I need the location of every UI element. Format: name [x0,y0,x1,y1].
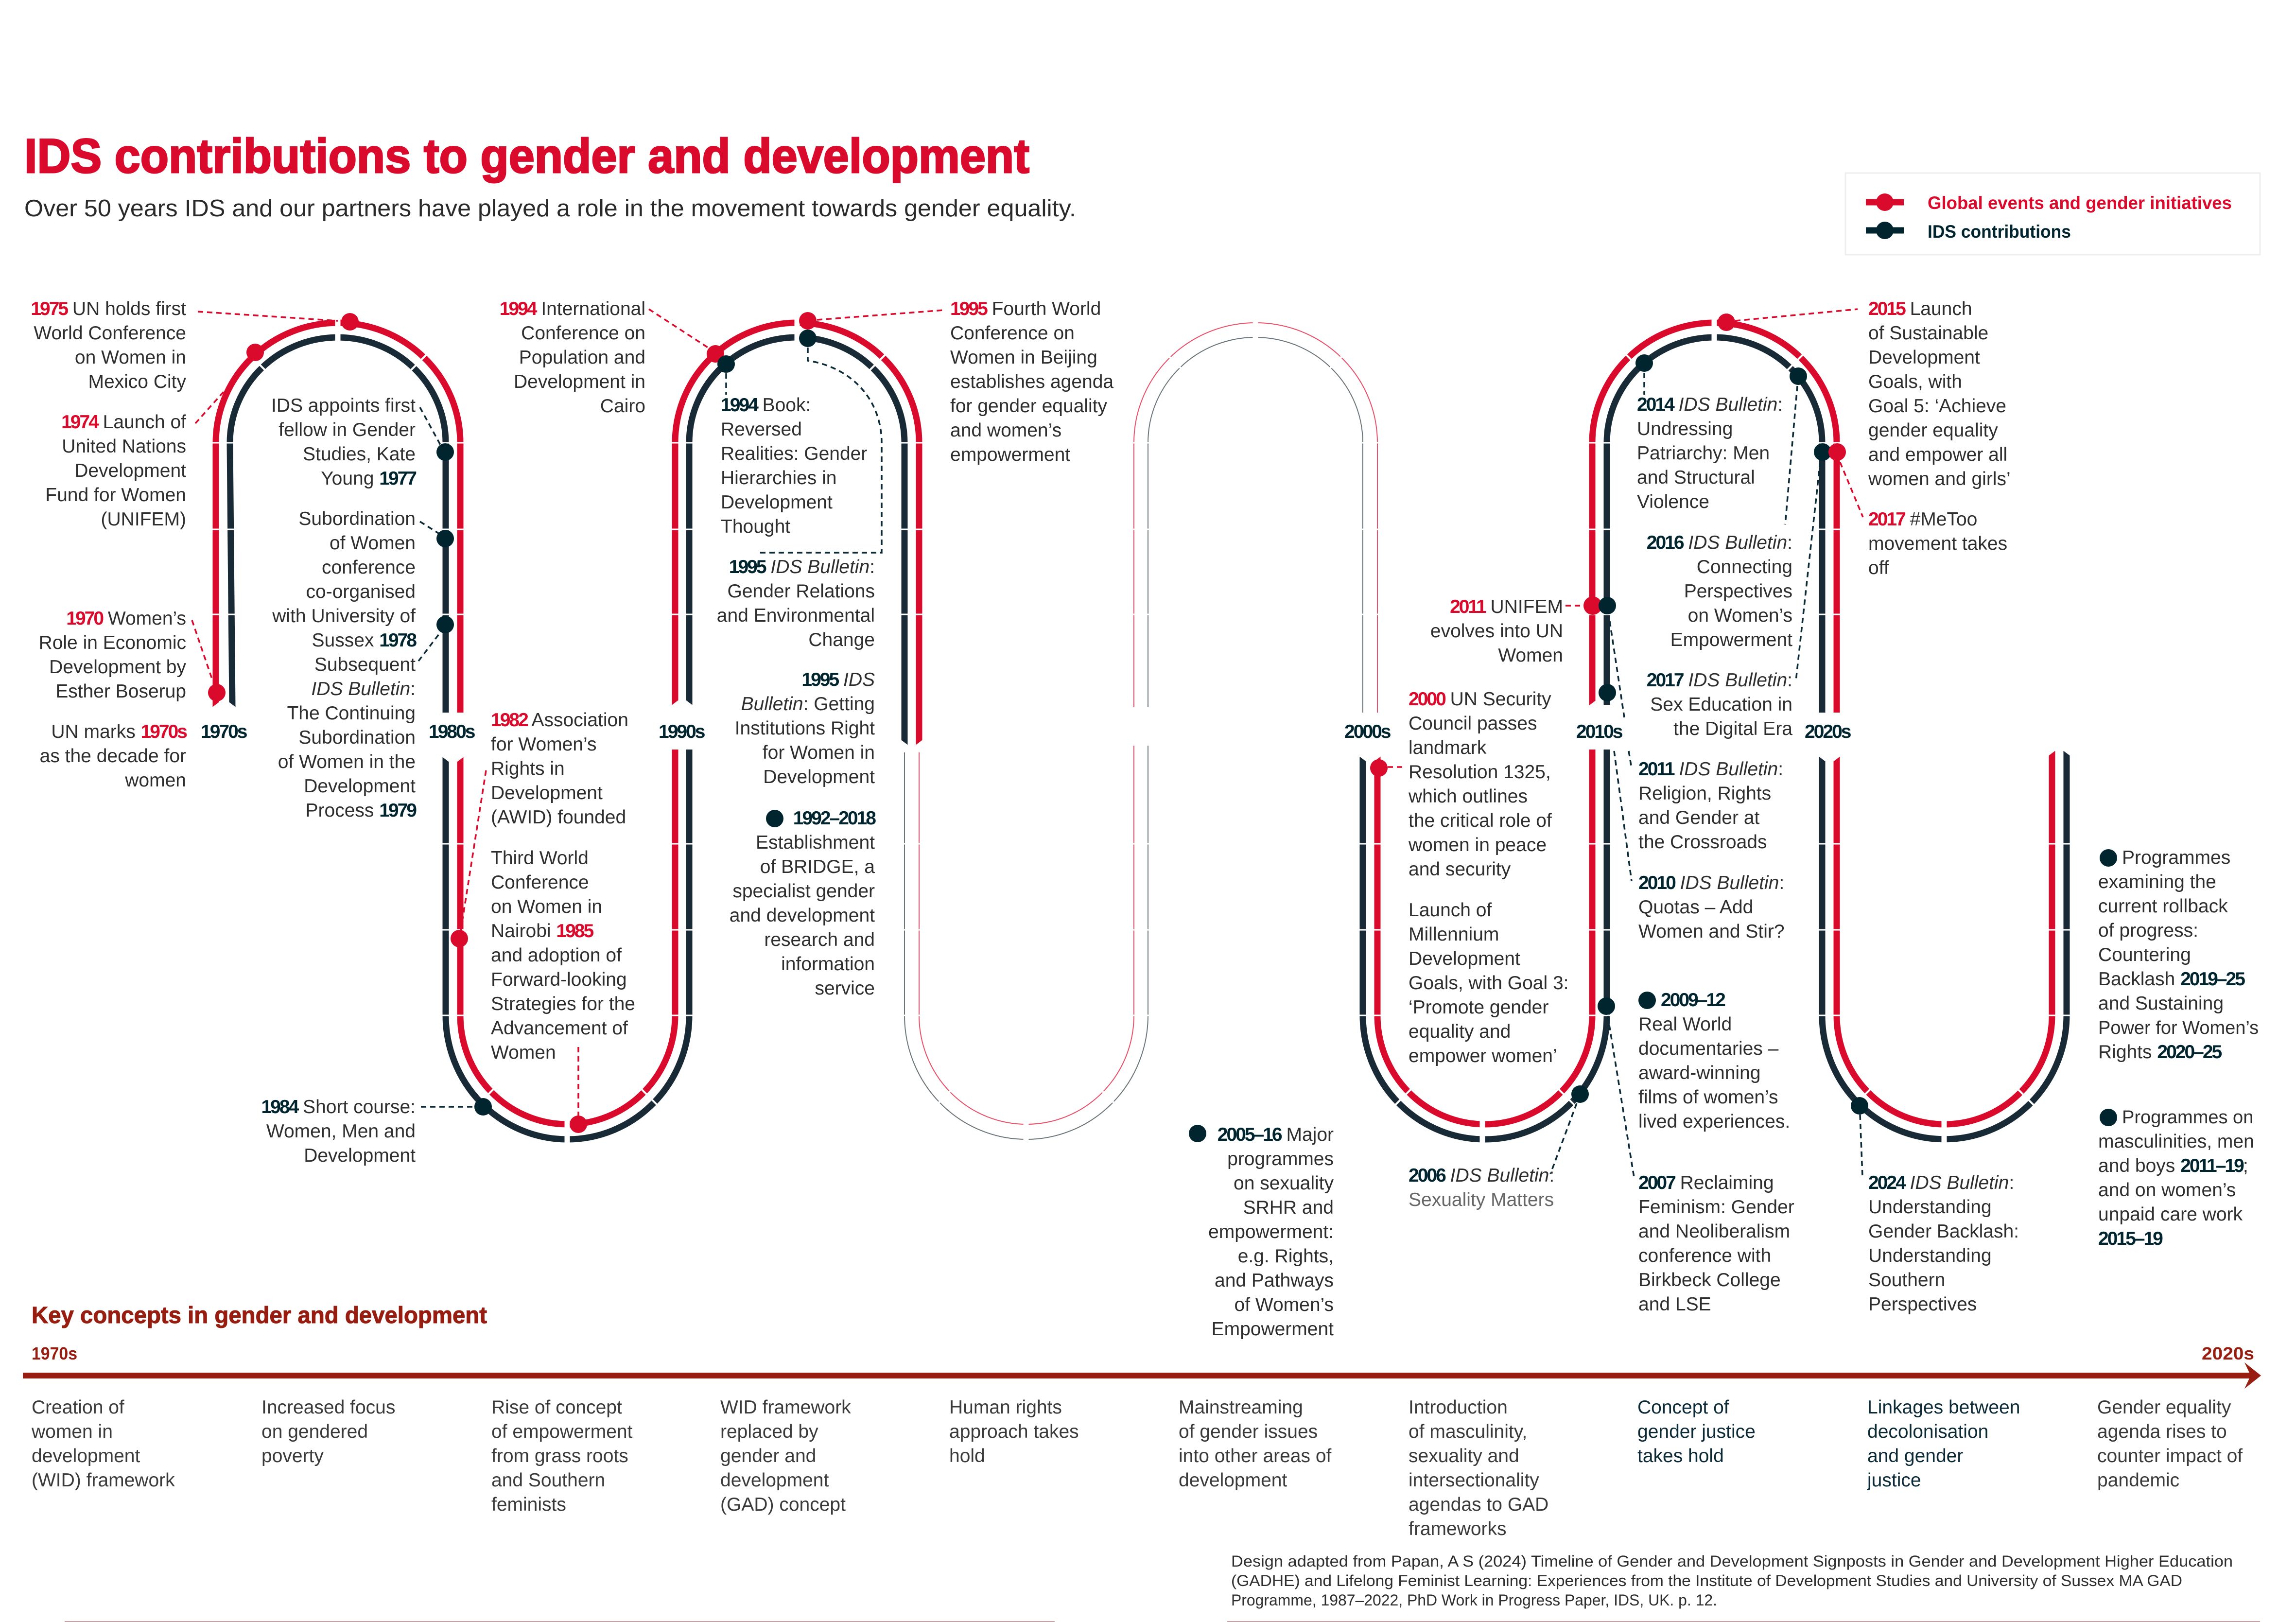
text: 2000 UN Security Council: women in peace [1408,835,1547,855]
concept: empowerment: of empowerment [491,1421,633,1442]
text: 1992-2018 BRIDGE: and development [730,905,875,926]
legend: Global events and gender initiatives [1928,193,2232,213]
key concepts start label: 1970s [32,1343,77,1363]
text: Millennium Development Goals: Development [1409,948,1520,969]
text: 2024 IDS Bulletin: Understanding [1868,1197,1992,1218]
concept: pandemic: agenda rises to [2097,1421,2227,1442]
text: 1994 Cairo conference: Conference on [521,323,645,344]
decade label: 2010s: 2010s [1576,721,1623,742]
text: 1995 bulletin gender relations: 1995 IDS Bulletin: [729,557,875,577]
text: 1974 UNIFEM: United Nations [62,436,186,457]
arrow: key concepts timeline [23,1362,2261,1389]
text: 1975 UN conference: 1975 UN holds first [31,298,186,319]
text: 1995 Beijing conference: 1995 Fourth World [950,298,1101,319]
text: 2006 IDS Bulletin: 2006 IDS Bulletin: [1409,1165,1554,1186]
text: 2016 IDS Bulletin: Empowerment [1670,629,1792,650]
text: 2016 IDS Bulletin: Perspectives [1684,581,1792,602]
text: 1984 short course: Women, Men and [266,1121,416,1142]
concept: decolonisation: justice [1867,1470,1921,1491]
text: 1982 AWID: 1982 Association [491,710,628,731]
text: 1978 conference and 1979 bulletin: co-organised [306,581,416,602]
concept: GAD: WID framework [720,1397,851,1418]
concept: pandemic: Gender equality [2097,1397,2231,1418]
subtitle: Over 50 years IDS and our partners have played a role in the movement towards gender equality. [24,195,1076,222]
marker: 1970 Boserup [192,620,226,701]
text: rollback programmes: Programmes [2122,847,2230,868]
text: 2011 IDS Bulletin: 2011 IDS Bulletin: [1638,759,1783,780]
text: masculinities programmes: Programmes on [2122,1107,2253,1128]
text: masculinities programmes: 2015–19 [2098,1228,2163,1249]
text: 2017 MeToo: off [1868,558,1889,578]
marker: 2017 MeToo [1828,443,1863,517]
marker: 1974 UNIFEM [195,344,264,423]
text: 2005-16 programmes [1189,1124,1334,1340]
marker: 2007 and 2009-12 [1598,997,1634,1177]
text: 2009-12 Real World: Real World [1638,1014,1732,1035]
text: 1978 conference and 1979 bulletin: with University of [272,606,416,627]
text: 1970 Boserup: Role in Economic [39,632,186,653]
marker: 1995 Beijing conference [799,310,944,330]
text: 2005-16 programmes: SRHR and [1243,1197,1334,1218]
text: 1995 Beijing conference: empowerment [950,444,1070,465]
marker: 2024 IDS Bulletin [1851,1097,1868,1176]
concept: empowerment: Rise of concept [491,1397,622,1418]
text: rollback programmes: examining the [2098,872,2216,892]
text: 2005-16 programmes: 2005–16 Major [1218,1124,1334,1145]
decade label: 1980s: 1980s [429,721,475,742]
concept: gendered poverty: on gendered [261,1421,368,1442]
concept: mainstreaming: Mainstreaming [1179,1397,1303,1418]
text: 1978 conference and 1979 bulletin: of Women [330,533,416,554]
text: 1978 conference and 1979 bulletin: conference [322,557,416,578]
text: 2007 Reclaiming Feminism: Birkbeck College [1638,1270,1781,1291]
text: 2011 UN Women: 2011 UNIFEM [1450,596,1563,617]
text: Millennium Development Goals: equality and [1409,1021,1511,1042]
marker: 2000 resolution [1370,759,1406,777]
text: 1994 book: Development [721,492,833,513]
concept: mainstreaming: into other areas of [1179,1446,1332,1466]
text: 2009-12 Real World: films of women’s [1638,1087,1778,1108]
text: 2016 IDS Bulletin: 2016 IDS Bulletin: [1647,532,1792,553]
text: 1994 book: Realities: Gender [721,443,867,464]
concept: human rights: hold [949,1446,985,1466]
text: 2010 IDS Bulletin: 2010 IDS Bulletin: [1638,872,1784,893]
text: Millennium Development Goals: Millennium [1409,924,1499,945]
text: 1985 Nairobi conference: Conference [491,872,589,893]
text: 1978 conference and 1979 bulletin: of Women in the [278,751,416,772]
text: 2005-16 programmes: of Women’s [1235,1294,1334,1315]
text: masculinities programmes: and on women’s [2098,1180,2236,1201]
text: 1978 conference and 1979 bulletin: Subsequent [314,654,416,675]
text: 2014 IDS Bulletin: and Structural [1637,467,1755,488]
decade label: 2020s: 2020s [1805,721,1851,742]
concept: GAD: gender and [720,1446,816,1466]
text: 2007 Reclaiming Feminism: and LSE [1638,1294,1711,1315]
text: 1994 Cairo conference: 1994 International [500,298,645,319]
text: 1970 Boserup: 1970 Women’s [66,608,186,629]
marker: 1994 Cairo conference [649,309,724,363]
marker: 2010 IDS Bulletin [1599,684,1632,881]
text: UN decade for women: UN marks 1970s [51,721,186,742]
text: 1995 Beijing conference: Women in Beijing [950,347,1097,368]
text: 2014 IDS Bulletin: Undressing [1637,419,1733,439]
text: 1982 AWID: Development [491,783,603,803]
marker: 1984 short course [421,1098,492,1116]
text: 2014 IDS Bulletin: Patriarchy: Men [1637,443,1770,464]
text: 1974 UNIFEM: Fund for Women [45,485,186,506]
text: 2006 IDS Bulletin: Sexuality Matters [1409,1189,1554,1210]
text: 1995 Beijing conference: and women’s [950,420,1061,441]
decade label: 2000s: 2000s [1344,721,1391,742]
concept: pandemic: counter impact of [2097,1446,2243,1466]
text: 2015 SDGs: and empower all [1868,444,2007,465]
concept: gendered poverty: poverty [261,1446,324,1466]
text: 1995 bulletin gender relations: Change [808,629,875,650]
marker: 1979 IDS Bulletin [418,616,454,661]
concept: gender justice: Concept of [1637,1397,1729,1418]
text: 2005-16 programmes: programmes [1227,1149,1334,1169]
text: 1995 bulletin institutions: Institutions Right [735,718,875,739]
text: 1985 Nairobi conference: Third World [491,848,589,869]
marker: 2011 UN Women [1565,596,1602,615]
concept: empowerment: from grass roots [491,1446,628,1466]
concept: decolonisation: Linkages between [1867,1397,2020,1418]
text: 2016 IDS Bulletin: on Women’s [1688,605,1792,626]
concept: pandemic: pandemic [2097,1470,2179,1491]
text: 1992-2018 BRIDGE: service [815,978,875,999]
text: 1992-2018 BRIDGE: research and [764,929,875,950]
text: 2015 SDGs: Goal 5: ‘Achieve [1868,396,2006,417]
source note: Design adapted from Papan, A S (2024) Timeline of Gender and Development Signposts in Gender and Development Higher Education [1231,1552,2233,1570]
text: 1985 Nairobi conference: Women [491,1042,556,1063]
concept: WID: development [32,1446,140,1466]
text: masculinities programmes: and boys 2011–19; [2098,1155,2248,1176]
text: 1992-2018 BRIDGE: Establishment [756,832,875,853]
text: 1995 Beijing conference: for gender equality [950,396,1108,417]
text: 2016 IDS Bulletin: Connecting [1697,557,1792,577]
text: masculinities programmes [2098,1107,2254,1249]
marker: 2014 IDS Bulletin [1635,354,1653,395]
text: 1992-2018 BRIDGE [730,808,876,999]
legend: IDS contributions [1928,222,2071,242]
text: 2011 IDS Bulletin: Religion, Rights [1638,783,1771,804]
text: 1994 Cairo conference: Cairo [600,396,645,417]
concept: masculinity and intersectionality: agendas to GAD [1409,1494,1548,1515]
text: 1974 UNIFEM: Development [74,460,186,481]
text: 1992-2018 BRIDGE: specialist gender [732,881,875,902]
marker: 2017 IDS Bulletin [1796,443,1831,681]
text: 1994 book: 1994 Book: [721,395,811,416]
text: 1995 bulletin institutions: Development [763,767,875,787]
text: rollback programmes: of progress: [2098,920,2198,941]
concept: GAD: (GAD) concept [720,1494,846,1515]
text: 2011 UN Women: evolves into UN [1430,621,1563,642]
concept: gender justice: gender justice [1637,1421,1756,1442]
text: 2014 IDS Bulletin: 2014 IDS Bulletin: [1637,394,1783,415]
text: 2000 UN Security Council: which outlines [1408,786,1528,807]
text: 2011 IDS Bulletin: the Crossroads [1638,832,1767,853]
text: 1978 conference and 1979 bulletin: Sussex 1978 [312,630,416,651]
text: 2005-16 programmes: Empowerment [1212,1319,1334,1340]
marker: 2006 IDS Bulletin [1550,1085,1589,1174]
text: 2005-16 programmes: empowerment: [1208,1221,1334,1242]
text: 1994 Cairo conference: Population and [519,347,645,368]
text: 1984 short course: 1984 Short course: [261,1097,416,1117]
text: UN decade for women: women [124,770,186,791]
text: 1995 bulletin institutions: 1995 IDS [801,669,875,690]
text: 1982 AWID: Rights in [491,758,565,779]
text: 2000 UN Security Council: landmark [1409,737,1487,758]
text: 1978 conference and 1979 bulletin: IDS Bulletin: [311,679,416,699]
text: 2009-12 Real World [1638,990,1790,1132]
text: 1974 UNIFEM: (UNIFEM) [101,509,186,530]
text: 2009-12 Real World: award-winning [1638,1063,1760,1083]
text: 2024 IDS Bulletin: Gender Backlash: [1868,1221,2019,1242]
text: Millennium Development Goals: Launch of [1409,900,1492,921]
concept: masculinity and intersectionality: frameworks [1409,1518,1507,1539]
text: 2015 SDGs: Goals, with [1868,371,1962,392]
text: 1978 conference and 1979 bulletin: The Continuing [287,703,416,724]
text: 2009-12 Real World: lived experiences. [1638,1111,1790,1132]
source note [1231,1552,2233,1609]
timeline track: 1970s arch [216,323,460,713]
text: 1970 Boserup: Esther Boserup [55,681,186,702]
text: 2017 MeToo: 2017 #MeToo [1868,509,1977,530]
text: 2024 IDS Bulletin: Southern [1868,1270,1945,1291]
marker: 1975 UN conference [198,312,359,331]
text: 2024 IDS Bulletin: 2024 IDS Bulletin: [1868,1172,2014,1193]
text: 1994 book: Thought [721,516,790,537]
timeline track: 2000s curve [1363,750,1607,1139]
concept: decolonisation: and gender [1867,1446,1963,1466]
text: 1985 Nairobi conference: on Women in [491,896,602,917]
concept: WID: (WID) framework [32,1470,175,1491]
marker: 2011 IDS Bulletin [1599,597,1632,768]
text: 2011 IDS Bulletin: and Gender at [1638,807,1760,828]
timeline track: 2020s curve [1822,750,2067,1139]
text: 2000 UN Security Council: and security [1409,859,1511,880]
timeline track: 1990s arch [675,323,919,745]
marker: 1995 IDS Bulletin [758,330,882,553]
text: 1994 book: Hierarchies in [721,468,836,488]
text: 2015 SDGs: of Sustainable [1868,323,1988,344]
text: 2010 IDS Bulletin: Women and Stir? [1638,921,1785,942]
title: IDS contributions to gender and development [24,129,1029,183]
text: 1995 Beijing conference: Conference on [950,323,1075,344]
concept: masculinity and intersectionality: intersectionality [1409,1470,1539,1491]
text: 1985 Nairobi conference: and adoption of [491,945,622,966]
marker: 1994 book [717,355,735,395]
concept: WID: women in [31,1421,113,1442]
marker: 1985 strategies [570,1047,587,1133]
text: 1977 IDS fellow: fellow in Gender [278,419,416,440]
text: 1985 Nairobi conference: Nairobi 1985 [491,921,592,942]
text: 1982 AWID: for Women’s [491,734,596,755]
text: 2015 SDGs: gender equality [1868,420,1998,441]
text: 1985 Nairobi conference: Forward-looking [491,969,627,990]
text: 2007 Reclaiming Feminism: 2007 Reclaiming [1638,1172,1774,1193]
text: 1992-2018 BRIDGE: of BRIDGE, a [760,856,875,877]
text: rollback programmes: current rollback [2098,896,2228,917]
text: masculinities programmes: unpaid care work [2098,1204,2243,1225]
text: 2017 IDS Bulletin: Sex Education in [1650,694,1792,715]
concept: masculinity and intersectionality: Introduction [1409,1397,1508,1418]
source note: (GADHE) and Lifelong Feminist Learning: Experiences from the Institute of Development Studies and University of Sussex MA GAD [1231,1572,2182,1589]
timeline track: faint upper arch [1134,323,1377,713]
text: 2015 SDGs: Development [1868,347,1980,368]
text: 2010 IDS Bulletin: Quotas – Add [1638,897,1753,918]
legend [1845,173,2260,255]
text: 1978 conference and 1979 bulletin: Subordination [298,508,416,529]
marker: 1977 IDS fellow [420,407,454,461]
text: 1978 conference and 1979 bulletin: Process 1979 [306,800,416,821]
text: 1995 bulletin institutions: for Women in [763,742,875,763]
text: 2024 IDS Bulletin: Perspectives [1868,1294,1977,1315]
concept: mainstreaming: development [1179,1470,1287,1491]
concept: WID: Creation of [32,1397,124,1418]
text: 1977 IDS fellow: Young 1977 [321,468,416,489]
text: 2017 IDS Bulletin: the Digital Era [1673,718,1792,739]
text: 1994 Cairo conference: Development in [514,371,645,392]
text: 1982 AWID: (AWID) founded [491,807,626,828]
concept: empowerment: feminists [491,1494,566,1515]
text: rollback programmes [2098,847,2259,1063]
text: 1992-2018 BRIDGE: 1992–2018 [793,808,876,829]
text: 2000 UN Security Council: 2000 UN Security [1409,689,1551,710]
text: 2005-16 programmes: on sexuality [1234,1173,1334,1194]
timeline track: 1980s curve [446,750,689,1139]
concept: GAD: development [720,1470,829,1491]
marker: 1982 and 1985 [451,770,486,947]
concept: mainstreaming: of gender issues [1179,1421,1318,1442]
concept: gendered poverty: Increased focus [261,1397,395,1418]
decade label: 1990s: 1990s [659,721,705,742]
text: 2005-16 programmes: e.g. Rights, [1238,1246,1334,1267]
concept: GAD: replaced by [720,1421,818,1442]
text: 2007 Reclaiming Feminism: Feminism: Gender [1638,1197,1794,1218]
text: 1970 Boserup: Development by [49,657,186,678]
text: rollback programmes: Rights 2020–25 [2098,1042,2221,1063]
text: 1995 Beijing conference: establishes agenda [950,371,1113,392]
text: 1974 UNIFEM: 1974 Launch of [61,412,186,433]
text: 1985 Nairobi conference: Strategies for the [491,994,635,1014]
concept: human rights: approach takes [949,1421,1079,1442]
text: 2000 UN Security Council: Council passes [1409,713,1537,734]
text: Millennium Development Goals: empower women’ [1409,1046,1557,1066]
text: 1985 Nairobi conference: Advancement of [491,1018,628,1039]
heading: key concepts: Key concepts in gender and development [32,1303,487,1328]
source note: Programme, 1987–2022, PhD Work in Progress Paper, IDS, UK. p. 12. [1231,1591,1717,1609]
marker: 2015 SDGs [1718,309,1858,331]
text: 1992-2018 BRIDGE: information [781,954,875,975]
text: 2005-16 programmes: and Pathways [1215,1270,1334,1291]
text: 2017 IDS Bulletin: 2017 IDS Bulletin: [1647,670,1792,691]
text: 1994 book: Reversed [721,419,802,440]
text: 2009-12 Real World: 2009–12 [1661,990,1725,1011]
text: 1975 UN conference: World Conference [34,323,186,344]
text: rollback programmes: Power for Women’s [2098,1018,2259,1038]
text: rollback programmes: Backlash 2019–25 [2098,969,2244,990]
text: 2007 Reclaiming Feminism: and Neoliberalism [1638,1221,1790,1242]
concept: decolonisation: decolonisation [1867,1421,1988,1442]
text: Millennium Development Goals: ‘Promote gender [1409,997,1548,1018]
text: 2017 MeToo: movement takes [1868,533,2007,554]
text: 2009-12 Real World: documentaries – [1638,1038,1779,1059]
marker: 2016 IDS Bulletin [1785,367,1807,524]
text: 1995 bulletin gender relations: and Environmental [717,605,875,626]
text: 2007 Reclaiming Feminism: conference with [1638,1245,1771,1266]
text: rollback programmes: and Sustaining [2098,993,2224,1014]
text: 2011 UN Women: Women [1498,645,1563,666]
text: 1975 UN conference: on Women in [75,347,186,368]
text: 2000 UN Security Council: Resolution 1325, [1409,762,1551,783]
concept: masculinity and intersectionality: of masculinity, [1409,1421,1527,1442]
timeline track: faint lower curve [904,746,1148,1139]
text: 2015 SDGs: 2015 Launch [1868,298,1972,319]
text: rollback programmes: Countering [2098,944,2191,965]
concept: masculinity and intersectionality: sexuality and [1409,1446,1519,1466]
marker: 1978 Subordination conference [420,522,454,547]
text: Millennium Development Goals: Goals, with Goal 3: [1409,973,1568,994]
text: 1995 bulletin institutions: Bulletin: Getting [741,694,875,715]
concept: gender justice: takes hold [1637,1446,1724,1466]
timeline track: 2010s arch [1592,323,1837,713]
text: 1995 bulletin gender relations: Gender Relations [727,581,875,602]
text: 2024 IDS Bulletin: Understanding [1868,1245,1992,1266]
text: 2015 SDGs: women and girls’ [1868,469,2011,489]
text: 2014 IDS Bulletin: Violence [1637,491,1709,512]
concept: human rights: Human rights [949,1397,1062,1418]
text: 1984 short course: Development [304,1145,416,1166]
concept: empowerment: and Southern [491,1470,605,1491]
decade label: 1970s: 1970s [201,721,247,742]
key concepts end label: 2020s [2202,1343,2254,1363]
text: 1978 conference and 1979 bulletin: Subordination [298,727,416,748]
text: 1977 IDS fellow: Studies, Kate [303,444,416,465]
text: 1975 UN conference: Mexico City [88,371,186,392]
text: UN decade for women: as the decade for [40,746,186,767]
text: 1978 conference and 1979 bulletin: Development [304,776,416,797]
text: masculinities programmes: masculinities, men [2098,1131,2254,1152]
text: 1977 IDS fellow: IDS appoints first [271,395,416,416]
text: 2000 UN Security Council: the critical role of [1409,810,1552,831]
